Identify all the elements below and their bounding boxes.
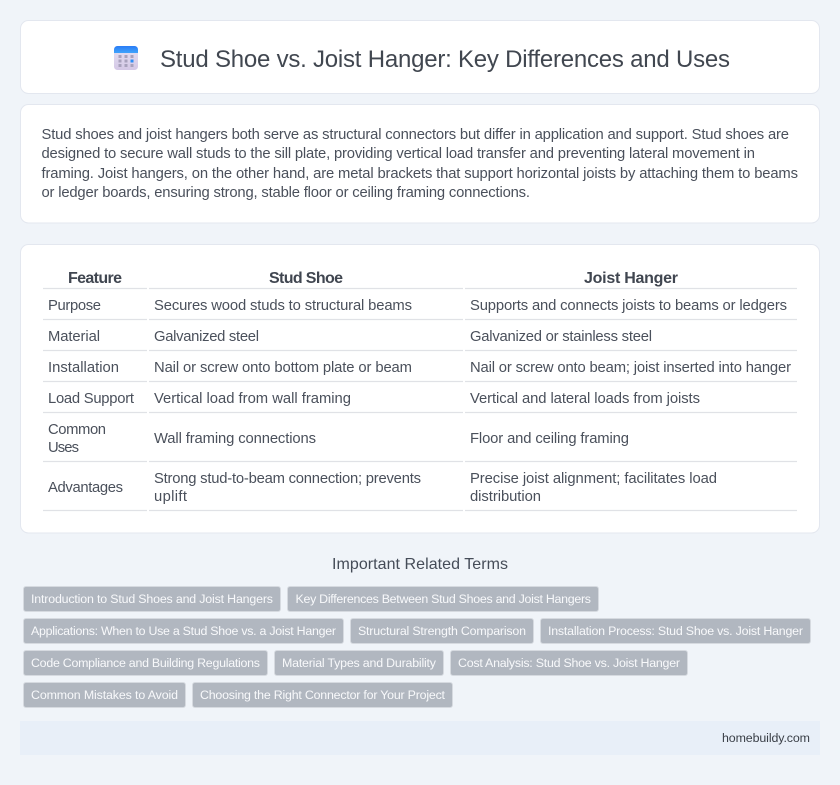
row: advantages: uplift bbox=[154, 489, 187, 505]
row: load support: Vertical and lateral loads from joists bbox=[470, 391, 700, 407]
text block: intro: Stud shoes and joist hangers both serve as structural connectors but differ in application and support. Stud shoes are bbox=[42, 127, 789, 143]
row: installation: Nail or screw onto bottom plate or beam bbox=[154, 360, 412, 376]
panel: header card bbox=[20, 20, 820, 94]
tag: Material Types and Durability bbox=[282, 656, 437, 670]
text block: intro bbox=[42, 127, 798, 201]
tag: Code Compliance and Building Regulations bbox=[31, 656, 260, 670]
text block: intro: designed to secure wall studs to the sill plate, providing vertical load transfer and preventing lateral movement in bbox=[42, 146, 755, 162]
row: installation: Nail or screw onto beam; joist inserted into hanger bbox=[470, 360, 791, 376]
tag bbox=[24, 618, 344, 644]
row: advantages: Strong stud-to-beam connection; prevents bbox=[154, 471, 421, 487]
tag bbox=[288, 586, 598, 612]
tag: Common Mistakes to Avoid bbox=[31, 688, 178, 702]
heading: related terms: Important Related Terms bbox=[332, 556, 508, 573]
panel: comparison table bbox=[20, 244, 820, 533]
row: material: Material bbox=[48, 329, 100, 345]
row: material: Galvanized steel bbox=[154, 329, 259, 345]
tag bbox=[350, 618, 534, 644]
row: installation: Installation bbox=[48, 360, 119, 376]
table header: Feature bbox=[68, 270, 122, 287]
row: material: Galvanized or stainless steel bbox=[470, 329, 652, 345]
tag: Introduction to Stud Shoes and Joist Hangers bbox=[31, 592, 273, 606]
row: common uses: Uses bbox=[48, 440, 79, 456]
row: advantages bbox=[48, 471, 717, 505]
footer site name: homebuildy.com bbox=[722, 731, 810, 745]
tag bbox=[24, 650, 268, 676]
text block: intro: framing. Joist hangers, on the other hand, are metal brackets that support horizontal joists by attaching them to beams bbox=[42, 166, 798, 182]
tag bbox=[192, 682, 452, 708]
title: Stud Shoe vs. Joist Hanger: Key Differences and Uses bbox=[160, 46, 730, 73]
row: purpose bbox=[48, 298, 787, 314]
panel: intro paragraph bbox=[20, 104, 820, 223]
row: load support: Load Support bbox=[48, 391, 134, 407]
tag bbox=[540, 618, 810, 644]
tag bbox=[450, 650, 688, 676]
row: purpose: Secures wood studs to structural beams bbox=[154, 298, 412, 314]
row: load support: Vertical load from wall framing bbox=[154, 391, 351, 407]
text block: intro: or ledger boards, ensuring strong, stable floor or ceiling framing connections. bbox=[42, 185, 530, 201]
row: advantages: Advantages bbox=[48, 480, 123, 496]
tag: Structural Strength Comparison bbox=[358, 624, 526, 638]
row: advantages: distribution bbox=[470, 489, 541, 505]
table header bbox=[68, 270, 678, 287]
row: installation bbox=[48, 360, 791, 376]
row: purpose: Purpose bbox=[48, 298, 101, 314]
row: common uses: Common bbox=[48, 422, 106, 438]
footer bbox=[20, 721, 820, 755]
tag: Choosing the Right Connector for Your Project bbox=[200, 688, 446, 702]
row: load support bbox=[48, 391, 700, 407]
table header: Joist Hanger bbox=[584, 270, 678, 287]
row: common uses: Floor and ceiling framing bbox=[470, 431, 629, 447]
related term tags bbox=[24, 586, 810, 708]
tag: Applications: When to Use a Stud Shoe vs. a Joist Hanger bbox=[31, 624, 336, 638]
tag bbox=[24, 682, 186, 708]
row: common uses: Wall framing connections bbox=[154, 431, 316, 447]
row: material bbox=[48, 329, 652, 345]
tag: Installation Process: Stud Shoe vs. Joist Hanger bbox=[548, 624, 803, 638]
row: common uses bbox=[48, 422, 629, 456]
tag: Cost Analysis: Stud Shoe vs. Joist Hanger bbox=[458, 656, 680, 670]
tag: Key Differences Between Stud Shoes and Joist Hangers bbox=[296, 592, 591, 606]
icon: calendar bbox=[114, 46, 138, 70]
row: advantages: Precise joist alignment; facilitates load bbox=[470, 471, 717, 487]
row: purpose: Supports and connects joists to beams or ledgers bbox=[470, 298, 787, 314]
tag bbox=[274, 650, 444, 676]
table header: Stud Shoe bbox=[269, 270, 343, 287]
tag bbox=[24, 586, 280, 612]
